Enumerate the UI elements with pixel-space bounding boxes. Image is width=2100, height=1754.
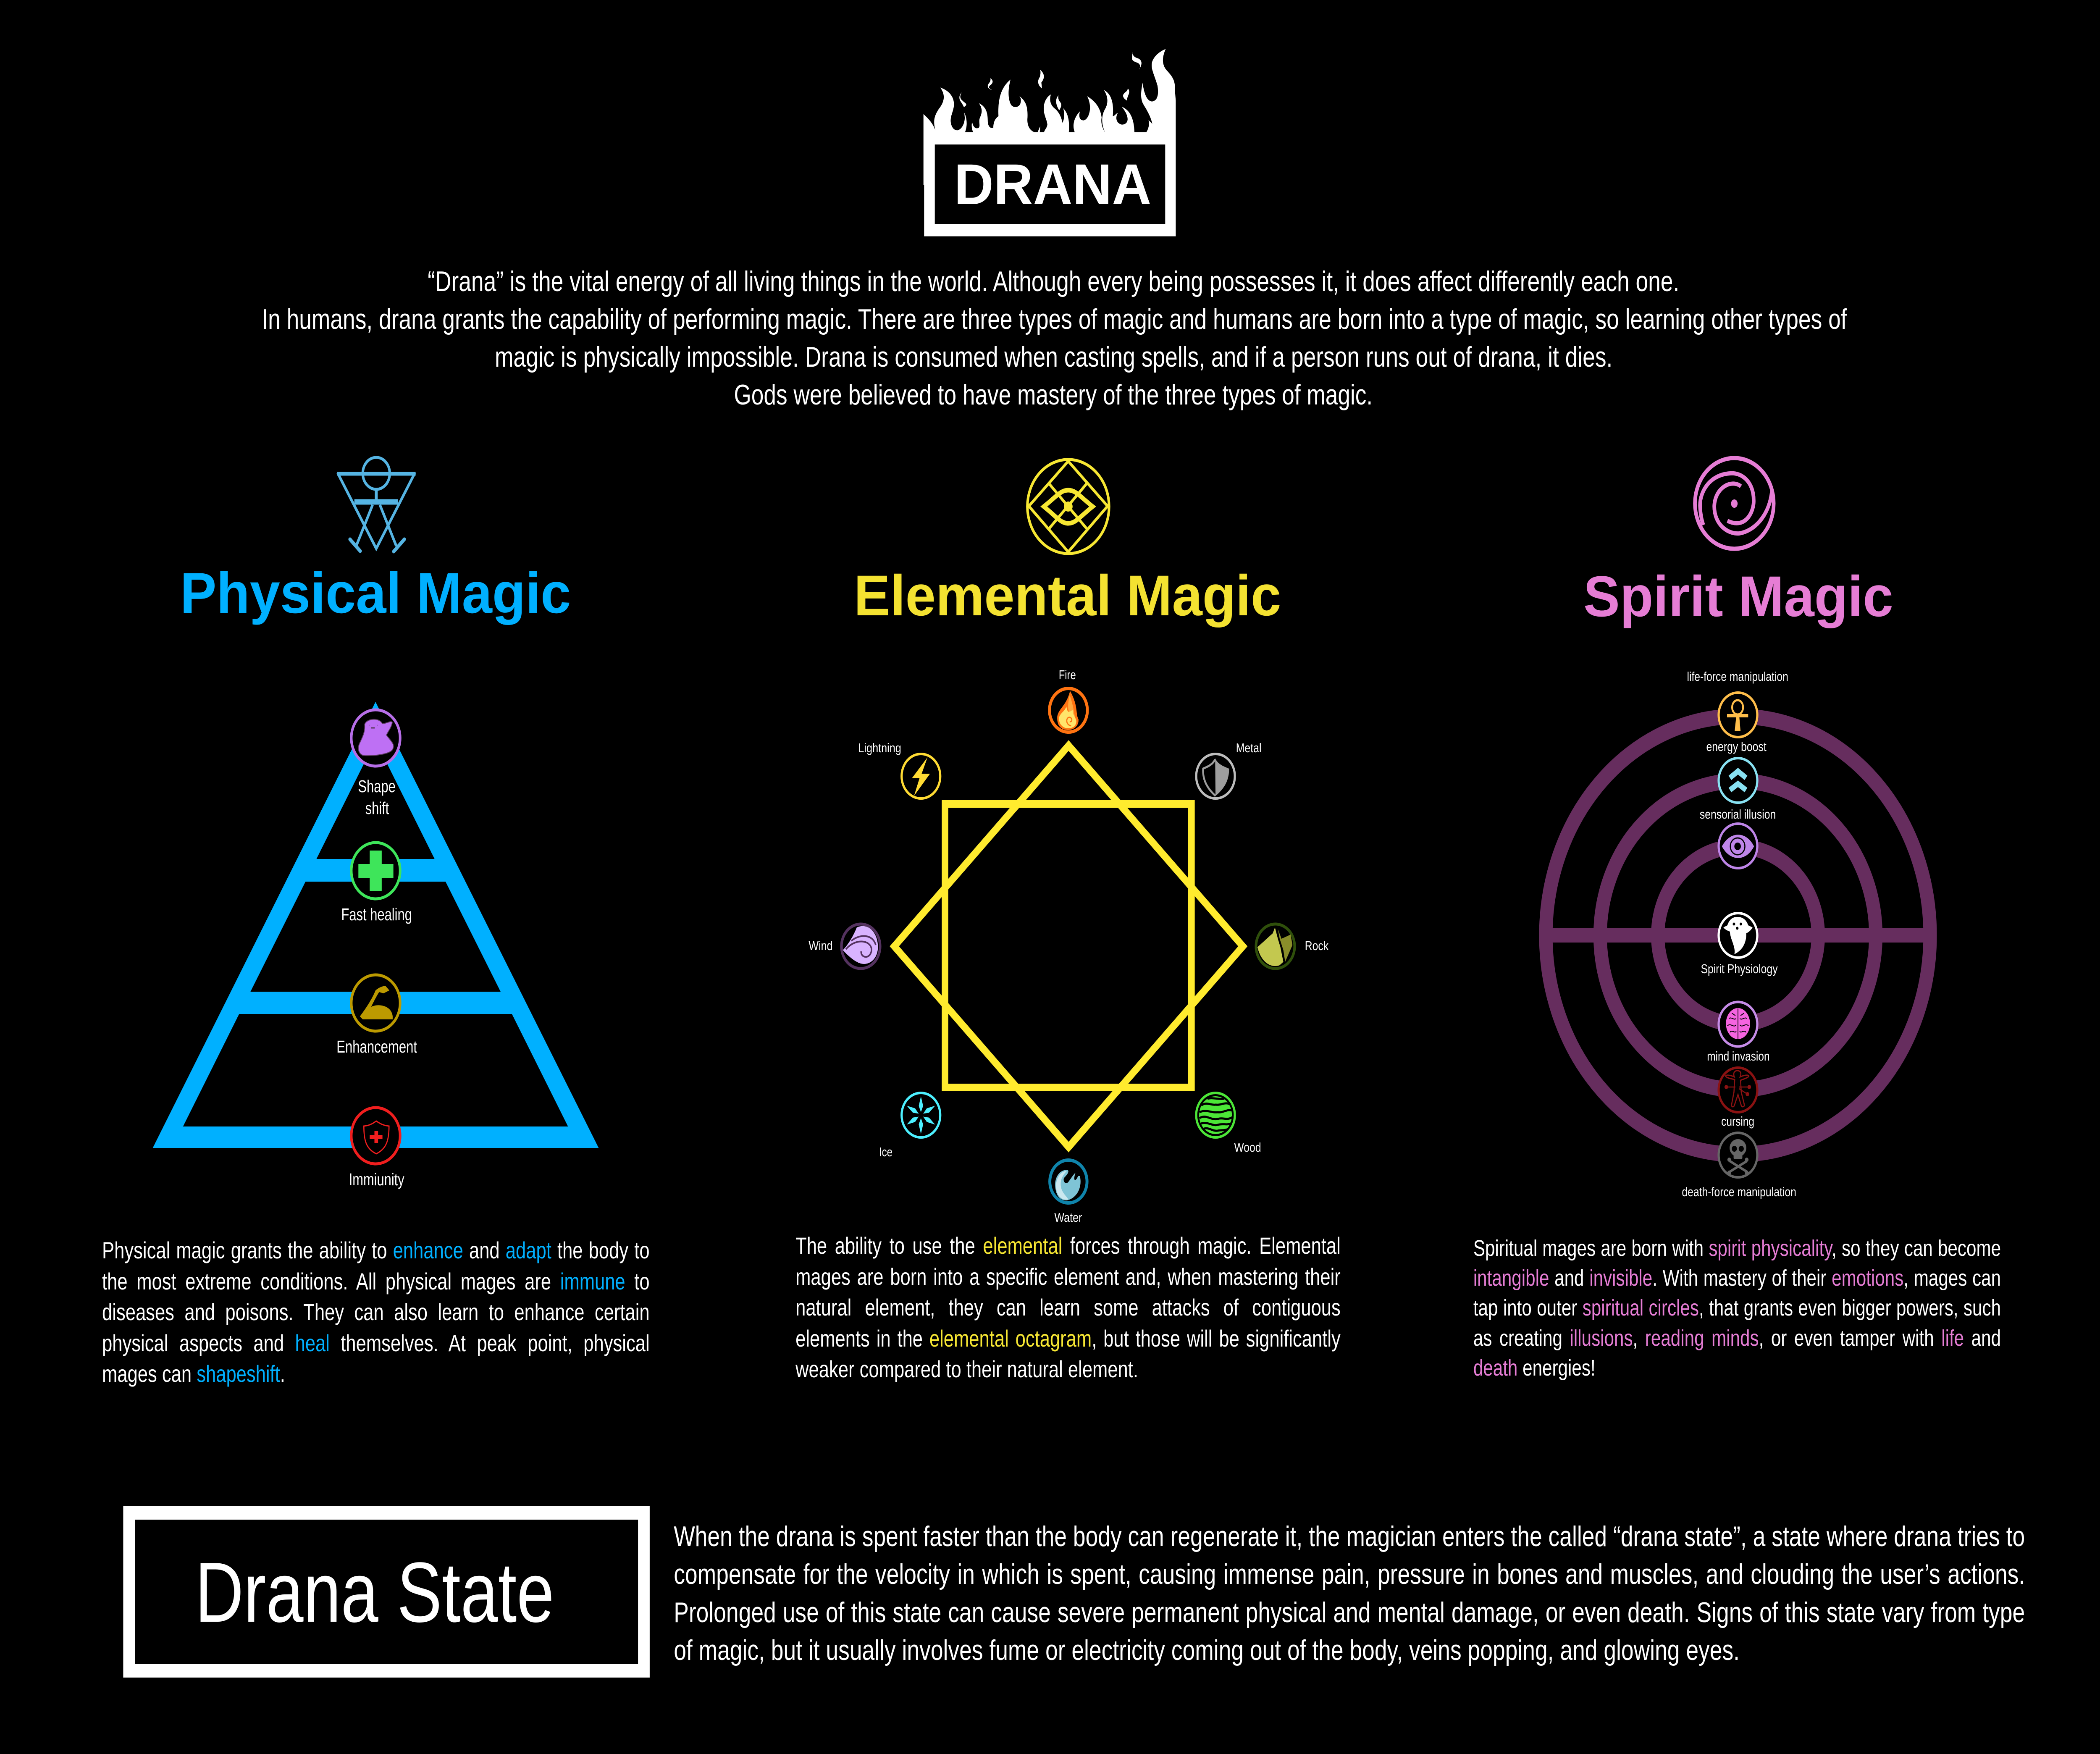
label: fire: Fire [1059,668,1076,682]
icon: fire [1050,688,1087,732]
label: shape shift: Shape [358,777,396,796]
heading: spirit magic: Spirit Magic [1583,565,1893,629]
intro text block: In humans, drana grants the capability of performing magic. There are three types of magic and humans are born into a type of magic, so learning other types of [262,303,1847,335]
text block: drana state description [674,1520,2025,1675]
icon: elemental magic sigil [1027,460,1109,554]
label: mind invasion: mind invasion [1707,1049,1770,1063]
text block: elemental magic description [795,1232,1341,1392]
label: ice: Ice [879,1145,892,1159]
icon: physical magic sigil [337,457,416,551]
icon: life-force [1719,693,1757,737]
label: cursing: cursing [1721,1114,1754,1129]
text block: spirit magic description [1473,1235,2001,1382]
label: metal: Metal [1236,741,1261,755]
icon: death-force [1719,1133,1757,1177]
text block: drana state description: Prolonged use of this state can cause severe permanent physical and mental damage, or even death. Signs of this state vary from type [674,1596,2025,1628]
label: energy boost: energy boost [1706,740,1767,754]
label: rock: Rock [1305,939,1329,953]
concentric circles diagram [1539,670,1937,1199]
intro text block [262,265,1847,411]
text block: physical magic description [102,1237,650,1396]
panel: elemental magic [795,460,1341,1392]
text block: elemental magic description: natural element, they can learn some attacks of contiguous [795,1294,1341,1321]
label: fast healing: Fast healing [341,905,412,924]
heading: elemental magic: Elemental Magic [854,564,1281,628]
drana state title box: Drana State [195,1545,554,1640]
elemental octagram [808,668,1329,1225]
text block: drana state description: compensate for the velocity in which is spent, causing immense pain, pressure in bones and muscles, and clouding the user’s actions. [674,1558,2025,1590]
drana state title box [129,1513,644,1671]
icon: mind invasion [1719,1002,1757,1047]
panel: spirit magic [1473,458,2001,1382]
label: enhancement: Enhancement [336,1037,417,1057]
text block: elemental magic description: elements in the elemental octagram, but those will be significantly [795,1325,1341,1352]
label: shape shift [358,777,396,818]
text block: physical magic description: diseases and poisons. They can also learn to enhance certain [102,1299,650,1325]
label: water: Water [1054,1210,1082,1225]
icon: sensorial illusion [1719,824,1757,868]
text block: elemental magic description: The ability to use the elemental forces through magic. Elemental [795,1232,1341,1259]
logo wordmark: DRANA [954,152,1151,217]
icon: spirit magic spiral [1695,458,1774,549]
label: wind: Wind [808,939,833,953]
label: spirit physiology: Spirit Physiology [1701,962,1778,976]
icon: cursing [1719,1068,1757,1112]
label: lightning: Lightning [858,741,901,755]
icon: enhancement [351,975,400,1031]
text block: physical magic description: Physical magic grants the ability to enhance and adapt the body to [102,1237,650,1263]
intro text block: magic is physically impossible. Drana is consumed when casting spells, and if a person runs out of drana, it dies. [495,341,1612,373]
icon: ice [902,1093,940,1137]
text block: spirit magic description: death energies! [1473,1355,1596,1381]
label: shape shift: shift [365,799,389,818]
text block: physical magic description: mages can shapeshift. [102,1360,285,1387]
logo flames and frame [924,49,1176,236]
text block: elemental magic description: weaker compared to their natural element. [795,1356,1138,1382]
text block: elemental magic description: mages are born into a specific element and, when mastering their [795,1263,1341,1290]
text block: spirit magic description: intangible and invisible. With mastery of their emotions, mages can [1473,1266,2001,1291]
text block: physical magic description: the most extreme conditions. All physical mages are immune to [102,1268,650,1294]
pyramid diagram [153,702,598,1189]
icon: shape shift [351,710,400,766]
icon: wind [841,924,880,969]
text block: drana state description: When the drana is spent faster than the body can regenerate it, the magician enters the called “drana state”, a state where drana tries to [674,1520,2025,1552]
icon: wood [1196,1093,1235,1137]
icon: metal [1196,754,1235,798]
icon: spirit physiology [1719,913,1757,958]
label: life-force manipulation: life-force manipulation [1687,670,1788,684]
label: wood: Wood [1234,1140,1261,1155]
label: sensorial illusion: sensorial illusion [1700,807,1776,822]
intro text block: Gods were believed to have mastery of the three types of magic. [734,379,1373,411]
icon: water [1050,1160,1087,1203]
text block: spirit magic description: Spiritual mages are born with spirit physicality, so they can become [1473,1236,2001,1261]
panel: physical magic [102,457,650,1396]
text block: drana state description: of magic, but it usually involves fume or electricity coming out of the body, veins popping, and glowing eyes. [674,1634,1740,1666]
text block: spirit magic description: as creating illusions, reading minds, or even tamper with life and [1473,1326,2001,1351]
intro text block: “Drana” is the vital energy of all living things in the world. Although every being possesses it, it does affect differently each one. [428,265,1679,297]
text block: physical magic description: physical aspects and heal themselves. At peak point, physical [102,1330,650,1356]
icon: rock [1256,924,1294,969]
text block: spirit magic description: tap into outer spiritual circles, that grants even bigger powers, such [1473,1295,2001,1321]
icon: lightning [902,754,940,798]
icon: fast healing [351,843,400,899]
heading: physical magic: Physical Magic [180,561,571,625]
icon: energy boost [1719,758,1757,803]
label: death-force manipulation: death-force manipulation [1682,1185,1796,1199]
logo: flaming DRANA box [924,49,1176,236]
panel: drana state [129,1513,2025,1675]
label: immunity: Immiunity [349,1170,404,1189]
icon: immunity [351,1108,400,1164]
